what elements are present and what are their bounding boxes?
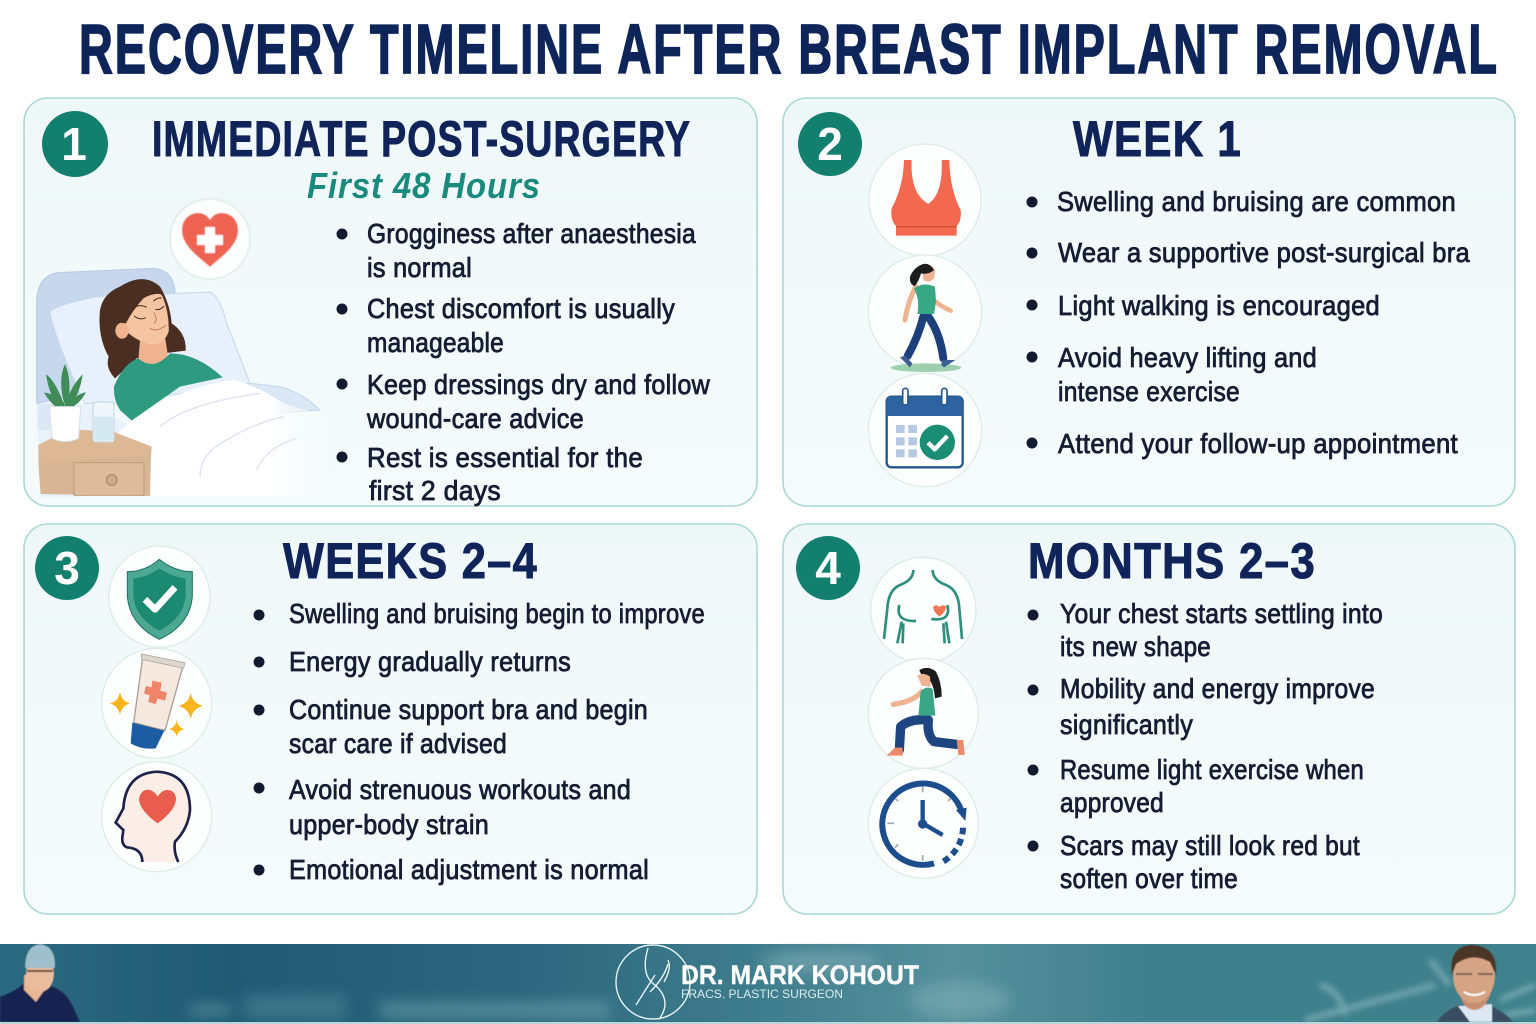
panel: immediate post-surgery: [24, 98, 757, 506]
icon: shield with check: [109, 546, 210, 647]
step number 4: [796, 536, 860, 600]
bullet text: light exercise: Resume light exercise when: [1060, 754, 1364, 785]
panel background 1: [24, 98, 757, 506]
icon: woman walking: [868, 255, 982, 372]
bullet text: rest: first 2 days: [369, 475, 501, 506]
bullet text: chest discomfort: [367, 293, 675, 358]
bullet text: bra: Wear a supportive post-surgical bra: [1058, 237, 1470, 268]
bullet text: dressings: wound-care advice: [366, 403, 584, 434]
bullet text: walking: Light walking is encouraged: [1058, 290, 1380, 321]
bullet text: chest shape: its new shape: [1060, 631, 1211, 662]
icon: woman doing lunge: [868, 658, 978, 768]
panel background 3: [24, 524, 757, 914]
bullet text: energy: Energy gradually returns: [289, 646, 571, 677]
bullet text: light exercise: [1060, 754, 1364, 818]
bullet text: rest: [367, 442, 643, 506]
bullet text: light exercise: approved: [1060, 787, 1164, 818]
bullet text: mobility: significantly: [1060, 709, 1193, 740]
icon: heart with medical cross: [170, 199, 250, 279]
icon: scar cream tube with sparkles: [102, 648, 212, 758]
step number 3: 3: [54, 542, 80, 594]
panel: weeks 2-4: [24, 524, 757, 914]
step number 3: [35, 536, 99, 600]
icon: clock: [868, 768, 978, 878]
bullet text: lifting: Avoid heavy lifting and: [1058, 342, 1317, 373]
bullet text: follow-up: Attend your follow-up appointment: [1058, 428, 1458, 459]
bullet text: grogginess: is normal: [367, 252, 472, 283]
bullet text: improving: Swelling and bruising begin to improve: [289, 598, 705, 629]
bullet text: grogginess: Grogginess after anaesthesia: [367, 218, 696, 249]
bullet text: strenuous: upper-body strain: [289, 809, 489, 840]
panel: months 2-3: [783, 524, 1515, 914]
panel background 2: [783, 98, 1515, 506]
bullet text: dressings: Keep dressings dry and follow: [367, 369, 710, 400]
illustration: woman resting in bed: [37, 268, 340, 497]
bullet dots: [1026, 196, 1038, 448]
heading: immediate post-surgery: IMMEDIATE POST-SURGERY: [152, 111, 691, 167]
bullet text: chest shape: [1060, 598, 1383, 662]
bullet text: mobility: Mobility and energy improve: [1060, 673, 1375, 704]
bullet text: lifting: intense exercise: [1058, 376, 1240, 407]
bullet text: strenuous: Avoid strenuous workouts and: [289, 774, 631, 805]
bullet list: weeks 2-4: [254, 598, 705, 885]
bullet text: scars: Scars may still look red but: [1060, 830, 1360, 861]
step number 4: 4: [815, 542, 841, 594]
bullet dots: [336, 228, 348, 462]
icon: post-surgical bra: [869, 144, 981, 256]
heading: months 2-3: MONTHS 2–3: [1028, 533, 1316, 589]
bullet text: strenuous: [289, 774, 631, 840]
step number 1: 1: [61, 118, 87, 170]
bullet list: immediate: [336, 218, 710, 506]
bullet text: emotional: Emotional adjustment is normal: [289, 854, 649, 885]
bullet text: chest discomfort: Chest discomfort is usually: [367, 293, 675, 324]
bullet text: support bra: scar care if advised: [289, 728, 507, 759]
footer soft background shapes: [190, 950, 1010, 1019]
bullet dots: [1028, 610, 1038, 852]
heading: weeks 2-4: WEEKS 2–4: [283, 533, 538, 589]
surgeon portrait, right: [1437, 945, 1513, 1022]
icon: chest outline with heart: [871, 557, 976, 663]
icon: calendar with check: [868, 373, 982, 487]
step number 1: [42, 111, 108, 177]
step number 2: 2: [817, 118, 843, 170]
brand tagline: FRACS. PLASTIC SURGEON: [681, 989, 843, 1001]
bullet text: scars: [1060, 830, 1360, 894]
panel: week 1: [783, 98, 1515, 506]
bullet text: support bra: Continue support bra and begin: [289, 694, 648, 725]
bullet text: scars: soften over time: [1060, 863, 1238, 894]
bullet text: swelling: Swelling and bruising are common: [1057, 186, 1456, 217]
bullet text: support bra: [289, 694, 648, 759]
brand name: DR. MARK KOHOUT: [681, 960, 919, 990]
step number 2: [798, 112, 862, 176]
bullet text: chest discomfort: manageable: [367, 327, 504, 358]
bullet text: rest: Rest is essential for the: [367, 442, 643, 473]
heading: week 1: WEEK 1: [1073, 111, 1242, 167]
bullet dots: [254, 610, 264, 876]
bullet text: mobility: [1060, 673, 1375, 740]
surgeon portrait, left: [0, 944, 80, 1022]
panel background 4: [783, 524, 1515, 914]
icon: head with heart: [102, 762, 212, 872]
bullet text: lifting: [1058, 342, 1317, 407]
subheading: first 48 hours: First 48 Hours: [307, 165, 541, 206]
bullet text: dressings: [366, 369, 710, 434]
footer background: [0, 944, 1536, 1022]
footer lower edge: [0, 1022, 1536, 1024]
bullet text: chest shape: Your chest starts settling into: [1060, 598, 1383, 629]
logo mark: [616, 945, 690, 1019]
footer blurred line shapes, right: [1305, 960, 1536, 1020]
footer banner: [0, 944, 1536, 1024]
bullet list: months 2-3: [1028, 598, 1383, 894]
bullet text: grogginess: [367, 218, 696, 283]
bullet list: week 1: [1026, 186, 1470, 459]
